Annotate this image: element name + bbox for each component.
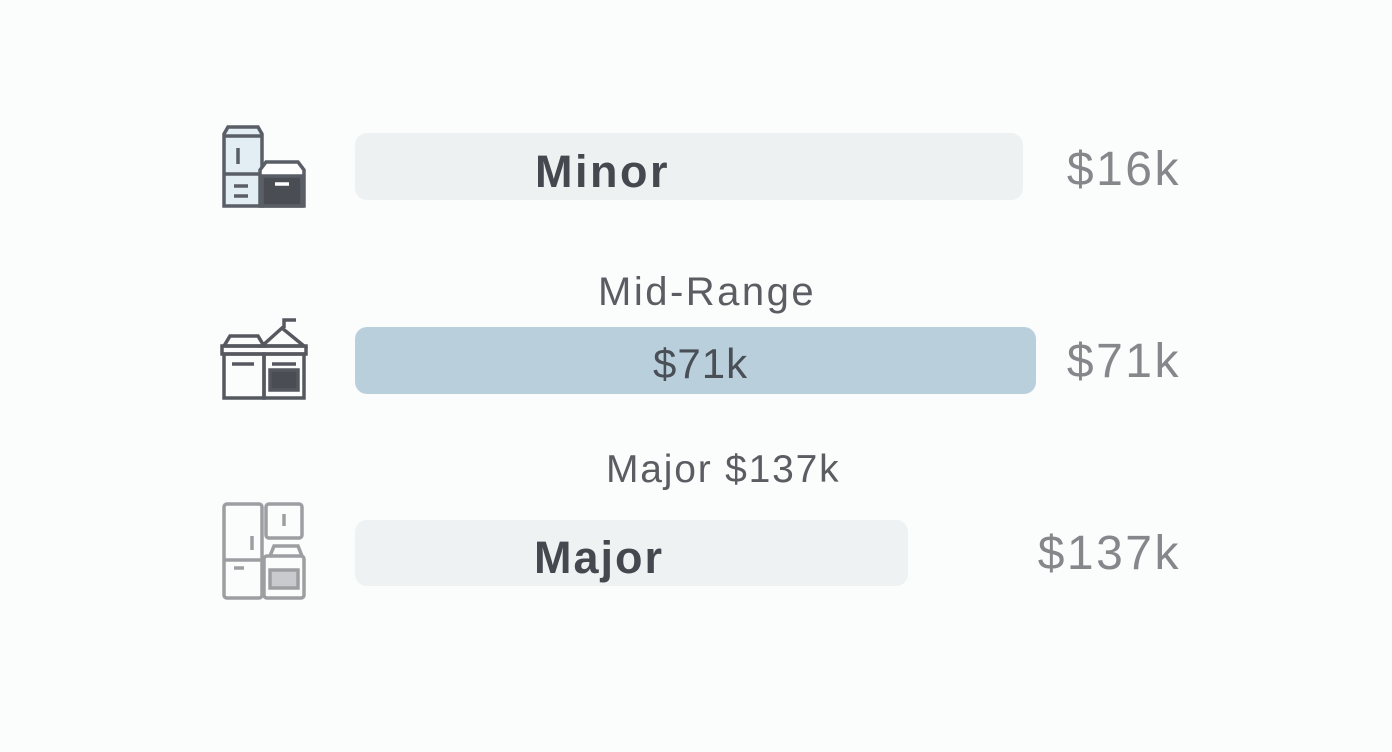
label: $71k in bar: $71k xyxy=(653,340,748,387)
heading: Mid-Range: Mid-Range xyxy=(598,270,816,314)
value: $71k: $71k xyxy=(1067,335,1181,388)
value: $16k: $16k xyxy=(1067,143,1181,196)
heading: Major $137k: Major $137k xyxy=(606,448,840,491)
bar: mid-range xyxy=(355,327,1036,394)
icon: major appliances xyxy=(222,502,306,600)
bar: minor xyxy=(355,133,1023,200)
value: $137k: $137k xyxy=(1038,527,1181,580)
icon: mid-range appliances xyxy=(220,318,308,400)
icon: minor appliances xyxy=(222,125,306,208)
bar: major xyxy=(355,520,908,586)
label: Minor: Minor xyxy=(535,146,670,197)
label: Major: Major xyxy=(534,532,664,583)
